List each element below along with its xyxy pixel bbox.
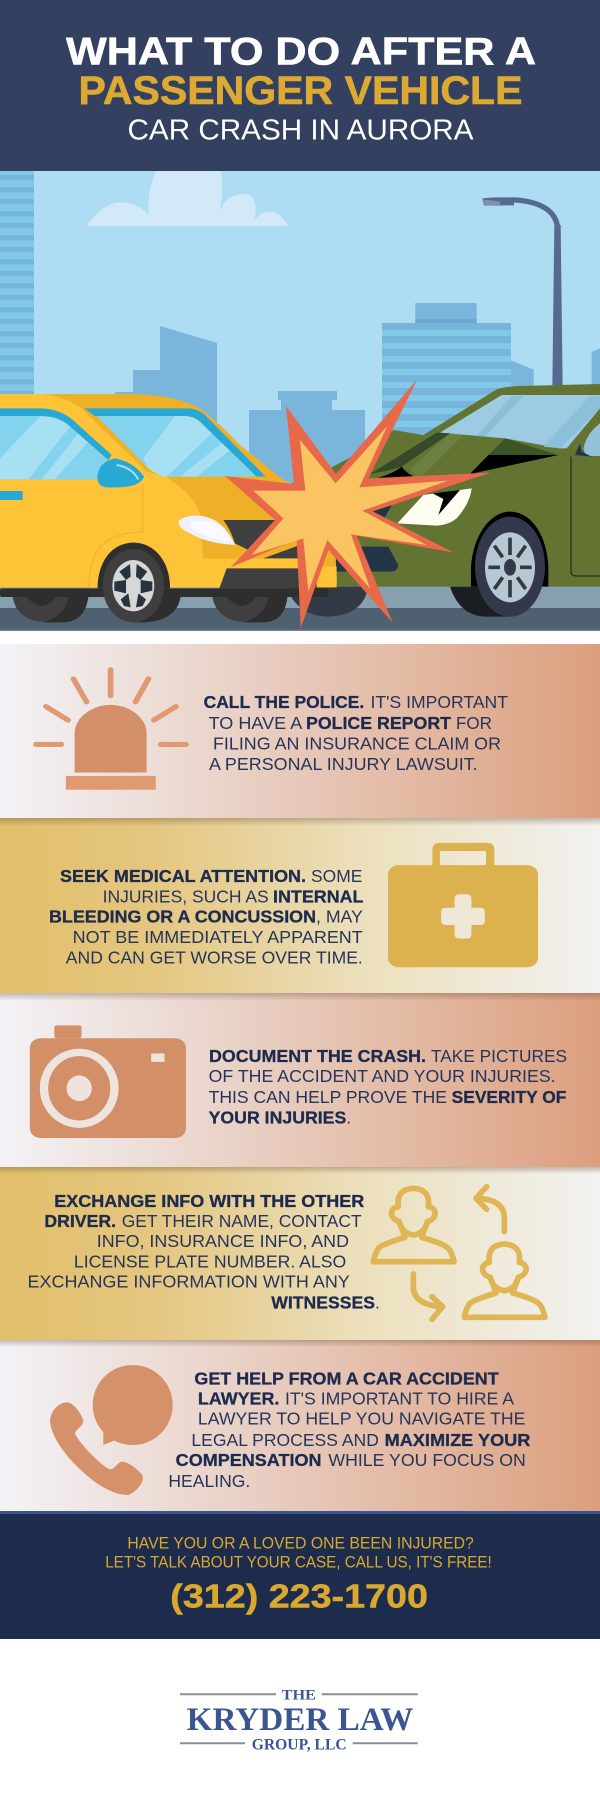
document text: SEVERITY OF [452, 1087, 567, 1107]
logo: the kryder law group [180, 1688, 418, 1753]
document text: DOCUMENT THE CRASH. [209, 1046, 426, 1066]
exchange text: GET THEIR NAME, CONTACT [122, 1211, 362, 1231]
icon: phone with speech bubble [50, 1365, 173, 1495]
police text [204, 692, 508, 774]
lawyer text: LAWYER. [198, 1389, 279, 1409]
medical text: INTERNAL [273, 886, 364, 906]
medical text: SOME [311, 866, 362, 886]
panel 1: call the police [0, 644, 600, 818]
lawyer text: GET HELP FROM A CAR ACCIDENT [194, 1369, 499, 1389]
lawyer text: MAXIMIZE YOUR [385, 1430, 531, 1450]
medical text: AND CAN GET WORSE OVER TIME. [66, 948, 363, 968]
lawyer text: WHILE YOU FOCUS ON [328, 1450, 526, 1470]
logo: the kryder law group: GROUP, LLC [252, 1736, 347, 1753]
document text: . [346, 1107, 351, 1127]
police text: IT'S IMPORTANT [370, 692, 508, 712]
panel 5: get help from a lawyer [0, 1340, 600, 1511]
hero illustration: two cars crashing [0, 171, 600, 631]
police text: FOR [456, 713, 492, 733]
medical text: INJURIES, SUCH AS [103, 886, 269, 906]
document text: OF THE ACCIDENT AND YOUR INJURIES. [209, 1066, 556, 1086]
exchange text: WITNESSES [271, 1293, 375, 1313]
crash explosion star [225, 379, 491, 628]
title line 3: CAR CRASH IN AURORA [128, 115, 474, 147]
cta text line 2: LET'S TALK ABOUT YOUR CASE, CALL US, IT'S FREE! [105, 1552, 492, 1571]
lawyer text: HEALING. [168, 1471, 250, 1491]
green car [283, 384, 600, 617]
call to action footer [0, 1511, 600, 1639]
document text [209, 1046, 567, 1127]
lawyer text: LEGAL PROCESS AND [191, 1430, 379, 1450]
police text: FILING AN INSURANCE CLAIM OR [213, 733, 501, 753]
exchange text: DRIVER. [44, 1211, 116, 1231]
lawyer text [168, 1369, 531, 1491]
title line 1: WHAT TO DO AFTER A [66, 30, 536, 74]
document text: THIS CAN HELP PROVE THE [209, 1087, 447, 1107]
police text: TO HAVE A [209, 713, 303, 733]
exchange text: LICENSE PLATE NUMBER. ALSO [74, 1252, 346, 1272]
medical text: SEEK MEDICAL ATTENTION. [60, 866, 306, 886]
icon: first aid kit [388, 843, 538, 967]
police text: A PERSONAL INJURY LAWSUIT. [209, 754, 478, 774]
road [0, 586, 600, 631]
medical text: NOT BE IMMEDIATELY APPARENT [73, 927, 363, 947]
exchange text [28, 1191, 380, 1313]
exchange text: EXCHANGE INFORMATION WITH ANY [28, 1272, 350, 1292]
cta text line 1: HAVE YOU OR A LOVED ONE BEEN INJURED? [127, 1533, 474, 1552]
icon: police siren [36, 670, 186, 790]
exchange text: INFO, INSURANCE INFO, AND [97, 1231, 349, 1251]
icon: two people exchanging [373, 1187, 545, 1319]
panel 4: exchange info [0, 1167, 600, 1340]
medical text: BLEEDING OR A CONCUSSION [49, 906, 316, 926]
yellow car [0, 394, 337, 622]
cloud [87, 171, 288, 226]
police text: POLICE REPORT [306, 713, 451, 733]
document text: TAKE PICTURES [431, 1046, 567, 1066]
icon: camera [30, 1025, 186, 1138]
exchange text: . [375, 1293, 380, 1313]
exchange text: EXCHANGE INFO WITH THE OTHER [54, 1191, 365, 1211]
lawyer text: LAWYER TO HELP YOU NAVIGATE THE [198, 1409, 525, 1429]
title line 2: PASSENGER VEHICLE [78, 69, 522, 113]
logo: the kryder law group: KRYDER LAW [187, 1702, 413, 1738]
street lamp [482, 197, 563, 388]
panel 3: document the crash [0, 993, 600, 1167]
header banner [0, 0, 600, 171]
phone number: (312) 223-1700 [170, 1577, 428, 1614]
document text: YOUR INJURIES [209, 1107, 346, 1127]
medical text: , MAY [316, 906, 363, 926]
panel 2: seek medical attention [0, 818, 600, 993]
logo: the kryder law group: THE [282, 1688, 316, 1704]
lawyer text: IT'S IMPORTANT TO HIRE A [285, 1389, 514, 1409]
lawyer text: COMPENSATION [176, 1450, 322, 1470]
police text: CALL THE POLICE. [204, 692, 364, 712]
medical text [49, 866, 364, 968]
skyline buildings [0, 171, 600, 500]
